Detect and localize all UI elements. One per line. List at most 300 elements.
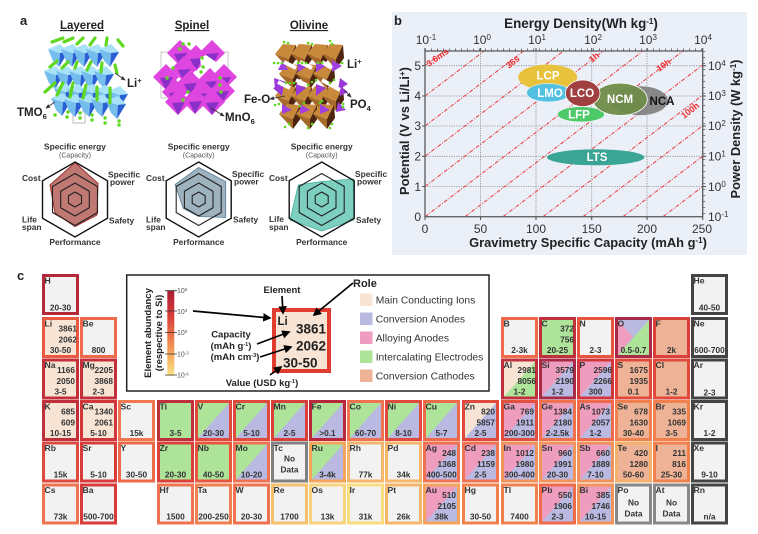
- title: Energy Density: ): [653, 16, 658, 31]
- cell Hf: 1500: [166, 512, 185, 522]
- cell Nb: [196, 443, 230, 481]
- cell O: O: [618, 319, 624, 329]
- cell Zn: 820: [481, 406, 495, 416]
- legend box: [127, 275, 489, 391]
- cell Ba: Ba: [82, 485, 94, 495]
- duration labels: 3.6ms: [424, 46, 451, 69]
- right axis labels: 0: [721, 180, 726, 189]
- ellipse: LCP: LCP: [536, 70, 560, 82]
- cell Al: 8056: [518, 376, 536, 386]
- left axis labels: 1: [414, 180, 421, 194]
- cell K: 10-15: [50, 428, 71, 438]
- cell Zr: [158, 443, 192, 481]
- cell Br: Br: [656, 402, 666, 412]
- cell As: 1073: [592, 406, 610, 416]
- radar labels: olivine: Cost: [269, 173, 288, 183]
- cell I: [654, 443, 688, 481]
- cell Ne: 600-700: [694, 345, 725, 355]
- axis ticks: [422, 48, 706, 220]
- cell Sr: 5-10: [90, 470, 107, 480]
- cell Mg: 2205: [95, 365, 113, 375]
- cell Ga: 769: [520, 406, 534, 416]
- cell Cs: Cs: [44, 485, 56, 495]
- ellipse: LCO: [565, 80, 600, 107]
- y axis title: power density: -1: [729, 63, 738, 71]
- top axis labels: 0: [486, 33, 491, 42]
- cell Ge: Ge: [542, 402, 553, 412]
- panel a: cathode structures: [17, 13, 387, 247]
- sample Li cell: 30-50: [283, 356, 318, 370]
- radar: layered: [42, 162, 108, 237]
- radar labels: olivine: power: [357, 176, 382, 186]
- arrow: Fe-O: [270, 96, 285, 99]
- cell C: 372: [560, 324, 574, 334]
- top axis labels: 10: [694, 33, 707, 47]
- heading: Olivine: Olivine: [290, 20, 328, 32]
- cell Se: [616, 402, 650, 440]
- radar labels: olivine: Specific energy: [291, 142, 353, 152]
- cell Bi: 10-15: [585, 512, 606, 522]
- cell Ga: 1911: [516, 418, 534, 428]
- cell Tl: [502, 485, 536, 523]
- cell Br: 335: [672, 406, 686, 416]
- cell Xe: 9-10: [701, 470, 718, 480]
- cell Sn: 20-30: [547, 470, 568, 480]
- abundance axis title: Element abundancy: [143, 287, 154, 378]
- cell Al: Al: [504, 360, 512, 370]
- cell Cs: 73k: [54, 512, 68, 522]
- top axis labels: 10: [584, 33, 597, 47]
- cell Pd: 34k: [397, 470, 411, 480]
- label: Element: Element: [264, 285, 301, 296]
- radar: spinel: [166, 162, 231, 237]
- label: Capacity: Capacity: [211, 330, 252, 340]
- radar labels: olivine: [269, 142, 387, 247]
- top axis labels: 2: [597, 33, 602, 42]
- radar labels: layered: Cost: [22, 173, 41, 183]
- cell Mo: [234, 443, 268, 481]
- bottom axis labels: 200: [637, 222, 657, 236]
- ellipse: LCP: [518, 64, 577, 90]
- ellipse: LTS: LTS: [587, 152, 608, 164]
- cell Zr: Zr: [160, 443, 169, 453]
- cell As: As: [580, 402, 591, 412]
- radar labels: layered: Life: [22, 215, 37, 225]
- cell Rn: [692, 485, 726, 523]
- crystal: olivine: [273, 41, 348, 129]
- cell Y: Y: [120, 443, 126, 453]
- cell At: At: [656, 485, 665, 495]
- cell In: 1980: [516, 459, 534, 469]
- cell Rb: Rb: [44, 443, 56, 453]
- ellipse: LCO: LCO: [570, 88, 594, 100]
- crystal: layered: [44, 38, 128, 125]
- legend: Conversion Cathodes: Conversion Cathodes: [376, 372, 475, 382]
- cell N: N: [580, 319, 586, 329]
- ellipse: LTS: [547, 149, 644, 165]
- cell V: [196, 402, 230, 440]
- legend: Main Conducting Ions: Main Conducting Ions: [376, 296, 475, 306]
- title: Energy Density: -1: [646, 17, 654, 26]
- radar labels: layered: Specific energy: [44, 142, 106, 152]
- abundance color bar: 10: [177, 372, 185, 380]
- cell Bi: Bi: [580, 485, 588, 495]
- abundance color bar: 10: [177, 330, 185, 337]
- cell Ge: 2180: [554, 418, 572, 428]
- right axis labels: 10: [708, 210, 721, 224]
- cell Pb: 550: [558, 490, 572, 500]
- arrow: MnO6: [211, 108, 224, 116]
- cell Ir: Ir: [350, 485, 356, 495]
- cell Ni: Ni: [388, 402, 396, 412]
- cell Mo: Mo: [236, 443, 248, 453]
- cell Re: Re: [274, 485, 285, 495]
- cell Sb: 7-10: [587, 470, 604, 480]
- cell H: [44, 276, 78, 314]
- cell O: [616, 318, 650, 356]
- cell P: 300: [589, 386, 603, 396]
- cell S: 1935: [630, 376, 648, 386]
- label: Capacity: -3: [251, 353, 256, 359]
- label: NCA: NCA: [650, 96, 674, 108]
- cell Li: 3861: [59, 324, 77, 334]
- cell I: I: [656, 443, 658, 453]
- cell At: Data: [663, 508, 681, 518]
- cell Rh: 77k: [359, 470, 373, 480]
- cell Tl: Tl: [504, 485, 511, 495]
- label: Value: -1: [290, 379, 295, 385]
- cell Kr: 1-2: [704, 428, 716, 438]
- cell Tc: Data: [281, 464, 299, 474]
- cell Hg: 30-50: [470, 512, 491, 522]
- cell Be: [82, 318, 116, 356]
- cell Ag: [424, 443, 458, 481]
- cell B: 2-3k: [511, 345, 528, 355]
- cell Sb: 1889: [592, 459, 610, 469]
- abundance color bar: 10: [177, 352, 185, 358]
- cell As: 2057: [592, 418, 610, 428]
- cell Ag: 248: [442, 448, 456, 458]
- panel c: periodic table: [17, 268, 726, 523]
- top axis labels: [416, 33, 712, 47]
- abundance axis subtitle: (respective to Si): [154, 295, 165, 371]
- right axis labels: 4: [721, 59, 726, 68]
- cell Cu: [424, 402, 458, 440]
- cell Sc: 15k: [130, 428, 144, 438]
- cell Pb: 2-3: [552, 512, 564, 522]
- cell Te: Te: [618, 443, 627, 453]
- cell Tl: 7400: [510, 512, 529, 522]
- cell Sb: [578, 443, 612, 481]
- cell Ca: 2061: [95, 418, 113, 428]
- cell Al: 2981: [518, 365, 536, 375]
- cell P: [578, 360, 612, 398]
- y axis title: power density: ): [728, 60, 743, 64]
- label: Li+ layered: Li: [127, 78, 137, 90]
- left axis labels: 2: [414, 150, 421, 164]
- cell Te: 420: [634, 448, 648, 458]
- cell Pt: 26k: [397, 512, 411, 522]
- right axis labels: 10: [708, 180, 721, 194]
- cell Cs: [44, 485, 78, 523]
- cell Na: [44, 360, 78, 398]
- legend: Intercalating Electrodes: Intercalating Electrodes: [376, 352, 483, 364]
- cell Hg: [464, 485, 498, 523]
- cell In: 1012: [516, 448, 534, 458]
- arrow: PO4: [344, 90, 351, 97]
- x axis title: ): [703, 235, 707, 250]
- cell Zr: 20-30: [165, 470, 186, 480]
- cell Mn: 2-5: [284, 428, 296, 438]
- cell Xe: [692, 443, 726, 481]
- cell Zn: [464, 402, 498, 440]
- cell Br: [654, 402, 688, 440]
- cell Be: Be: [82, 319, 94, 329]
- cell Cl: Cl: [656, 360, 664, 370]
- cell Mo: 10-20: [241, 470, 262, 480]
- label: Capacity: ): [248, 341, 251, 352]
- panel label c: c: [17, 268, 24, 283]
- cell Br: 1069: [668, 418, 686, 428]
- top axis labels: 3: [652, 33, 657, 42]
- cell He: [692, 276, 726, 314]
- bottom axis labels: 150: [582, 222, 602, 236]
- cell Pt: Pt: [388, 485, 396, 495]
- sample Li cell: [274, 310, 329, 371]
- cell Sr: Sr: [82, 443, 92, 453]
- legend: Alloying Anodes: Alloying Anodes: [376, 334, 449, 344]
- top axis labels: -1: [429, 33, 437, 42]
- cell Sb: 660: [596, 448, 610, 458]
- cell Ti: 3-5: [170, 428, 182, 438]
- cell Li: 30-50: [50, 345, 71, 355]
- cell Ru: [310, 443, 344, 481]
- radar labels: layered: Safety: [109, 216, 134, 226]
- cell Na: 3-5: [54, 386, 67, 396]
- cell Cd: [464, 443, 498, 481]
- cell Ag: 400-500: [426, 470, 457, 480]
- cell Cd: 238: [481, 448, 495, 458]
- cell Fe: Fe: [312, 402, 322, 412]
- panel label b: b: [394, 13, 402, 28]
- arrow: Li+ layered: [115, 73, 125, 80]
- cell Ga: [502, 402, 536, 440]
- top axis labels: 1: [541, 33, 546, 42]
- cell At: No: [666, 498, 677, 508]
- sample Li cell: 3861: [296, 322, 326, 336]
- ellipse: LFP: LFP: [568, 110, 590, 122]
- cell Rb: [44, 443, 78, 481]
- bottom axis labels: 0: [422, 222, 429, 236]
- cell V: 20-30: [203, 428, 224, 438]
- radar labels: spinel: power: [234, 176, 259, 186]
- cell Mn: Mn: [274, 402, 286, 412]
- cell Cr: 5-10: [243, 428, 260, 438]
- title: Energy Density: Energy Density(Wh kg: [504, 16, 646, 31]
- cell H: H: [44, 276, 51, 286]
- label: Capacity: (mAh cm: [211, 352, 251, 363]
- cell Rh: Rh: [350, 443, 361, 453]
- cell Po: No: [628, 498, 639, 508]
- ellipse: LMO: [527, 84, 570, 102]
- cell Ta: [196, 485, 230, 523]
- duration labels: 10h: [654, 57, 673, 74]
- cell Li: [44, 318, 78, 356]
- ellipse: NCM: [593, 83, 647, 116]
- cell Au: Au: [426, 485, 437, 495]
- cell I: 211: [673, 448, 686, 458]
- cell Na: Na: [44, 360, 56, 370]
- top axis labels: 10: [528, 33, 541, 47]
- cell Ne: Ne: [694, 319, 705, 329]
- legend: Conversion Anodes: Conversion Anodes: [376, 314, 465, 326]
- label: Capacity: ): [256, 352, 259, 363]
- plot frame: [425, 51, 703, 217]
- radar labels: layered: [22, 142, 140, 247]
- cell Ru: 3-4k: [319, 470, 336, 480]
- bottom axis labels: [422, 222, 712, 236]
- right axis labels: [708, 59, 729, 224]
- ellipse: LMO: LMO: [537, 88, 563, 100]
- radar labels: olivine: Life: [269, 214, 284, 224]
- cell N: [578, 318, 612, 356]
- heading: Spinel: Spinel: [175, 20, 209, 32]
- cell K: [44, 402, 78, 440]
- cell Sc: [120, 402, 154, 440]
- radar labels: olivine: (Capacity): [306, 152, 338, 160]
- cell Ne: [692, 318, 726, 356]
- cell Co: [348, 402, 382, 440]
- cell Ar: 2-3: [704, 388, 716, 398]
- cell F: F: [656, 319, 661, 329]
- label: Capacity: (mAh g: [211, 341, 243, 352]
- cell Na: 1166: [57, 365, 75, 375]
- cell Ga: Ga: [504, 402, 515, 412]
- left axis labels: 4: [414, 89, 421, 103]
- cell In: 300-400: [504, 470, 535, 480]
- abundance color bar: 10: [177, 288, 185, 295]
- left axis labels: 0: [414, 210, 421, 224]
- cell Au: 510: [442, 490, 456, 500]
- radar labels: spinel: Life: [146, 215, 161, 225]
- radar labels: layered: span: [22, 222, 42, 232]
- cell O: 0.5-0.7: [621, 345, 647, 355]
- cell Si: [540, 360, 574, 398]
- abundance color bar: 10: [177, 309, 185, 316]
- cell Re: [272, 485, 306, 523]
- cell Ir: [348, 485, 382, 523]
- cell Os: 13k: [321, 512, 335, 522]
- label: Capacity: [211, 330, 259, 363]
- cell Rb: 15k: [54, 470, 68, 480]
- right axis labels: 1: [721, 150, 726, 158]
- cell Fe: [310, 402, 344, 440]
- left axis labels: 5: [414, 59, 421, 73]
- cell In: [502, 443, 536, 481]
- arrow: TMO6: [46, 102, 55, 108]
- cell Ir: 31k: [359, 512, 373, 522]
- radar labels: olivine: span: [269, 222, 289, 232]
- cell Tc: [272, 443, 306, 481]
- abundance color bar: 6: [185, 287, 188, 292]
- cell F: 2k: [667, 345, 676, 355]
- cell Bi: 385: [596, 490, 610, 500]
- cell Ag: 1368: [438, 459, 456, 469]
- cell Si: Si: [542, 360, 550, 370]
- cell Mn: [272, 402, 306, 440]
- grid lines: [425, 51, 703, 217]
- cell S: 0.1: [628, 386, 640, 396]
- cell Br: 3-5: [666, 428, 678, 438]
- label: Capacity: -1: [243, 342, 248, 348]
- cell Sc: Sc: [120, 402, 131, 412]
- cell K: 609: [61, 418, 75, 428]
- cell Au: 38k: [435, 512, 449, 522]
- cell Cd: Cd: [464, 443, 476, 453]
- y axis title: potential: ): [397, 67, 412, 71]
- cell Pt: [386, 485, 420, 523]
- cell He: 40-50: [699, 302, 720, 312]
- cell I: 816: [672, 459, 686, 469]
- abundance color bar: -6: [185, 372, 189, 376]
- cell Ca: 5-10: [90, 428, 107, 438]
- label: MnO6: 6: [251, 117, 255, 126]
- cell Be: 800: [92, 345, 106, 355]
- cell Te: 50-60: [623, 470, 644, 480]
- cell S: [616, 360, 650, 398]
- label: Value: ): [295, 378, 298, 389]
- label: TMO6: TMO: [17, 107, 43, 119]
- arrows: [193, 283, 353, 375]
- cell Zn: 5857: [477, 418, 495, 428]
- duration labels: 1h: [587, 50, 601, 65]
- ellipse: NCM: NCM: [607, 94, 633, 106]
- cell I: 25-30: [661, 470, 682, 480]
- x axis title: -1: [695, 236, 703, 245]
- cell Y: [120, 443, 154, 481]
- cell Ar: [692, 360, 726, 398]
- radar: olivine: [289, 162, 354, 237]
- top axis labels: 4: [707, 33, 712, 42]
- cell Rn: n/a: [704, 512, 716, 522]
- cell Ca: [82, 402, 116, 440]
- cell At: [654, 485, 688, 523]
- cell Au: 2105: [438, 501, 456, 511]
- cell Na: 2050: [57, 376, 75, 386]
- cell Sn: 1991: [554, 459, 572, 469]
- cell Nb: Nb: [198, 443, 209, 453]
- cell Ba: [82, 485, 116, 523]
- duration labels: 100h: [679, 100, 701, 121]
- cell Se: 678: [634, 406, 648, 416]
- cell Al: [502, 360, 536, 398]
- radar labels: olivine: Performance: [296, 237, 348, 247]
- legend: Alloying Anodes: [360, 332, 449, 344]
- cell Hf: Hf: [160, 485, 169, 495]
- cell S: S: [618, 360, 624, 370]
- cell Se: Se: [618, 402, 628, 412]
- cell Mg: [82, 360, 116, 398]
- label: Li+ layered: +: [137, 76, 142, 85]
- cell Cd: 1159: [477, 459, 495, 469]
- y axis title: power density: Power Density (W kg: [728, 71, 743, 198]
- cell Ge: [540, 402, 574, 440]
- cell Li: 2062: [59, 334, 77, 344]
- sample Li cell: 2062: [296, 338, 326, 354]
- radar labels: spinel: Performance: [173, 237, 225, 247]
- cell Pd: Pd: [388, 443, 398, 453]
- cell Li: Li: [44, 319, 52, 329]
